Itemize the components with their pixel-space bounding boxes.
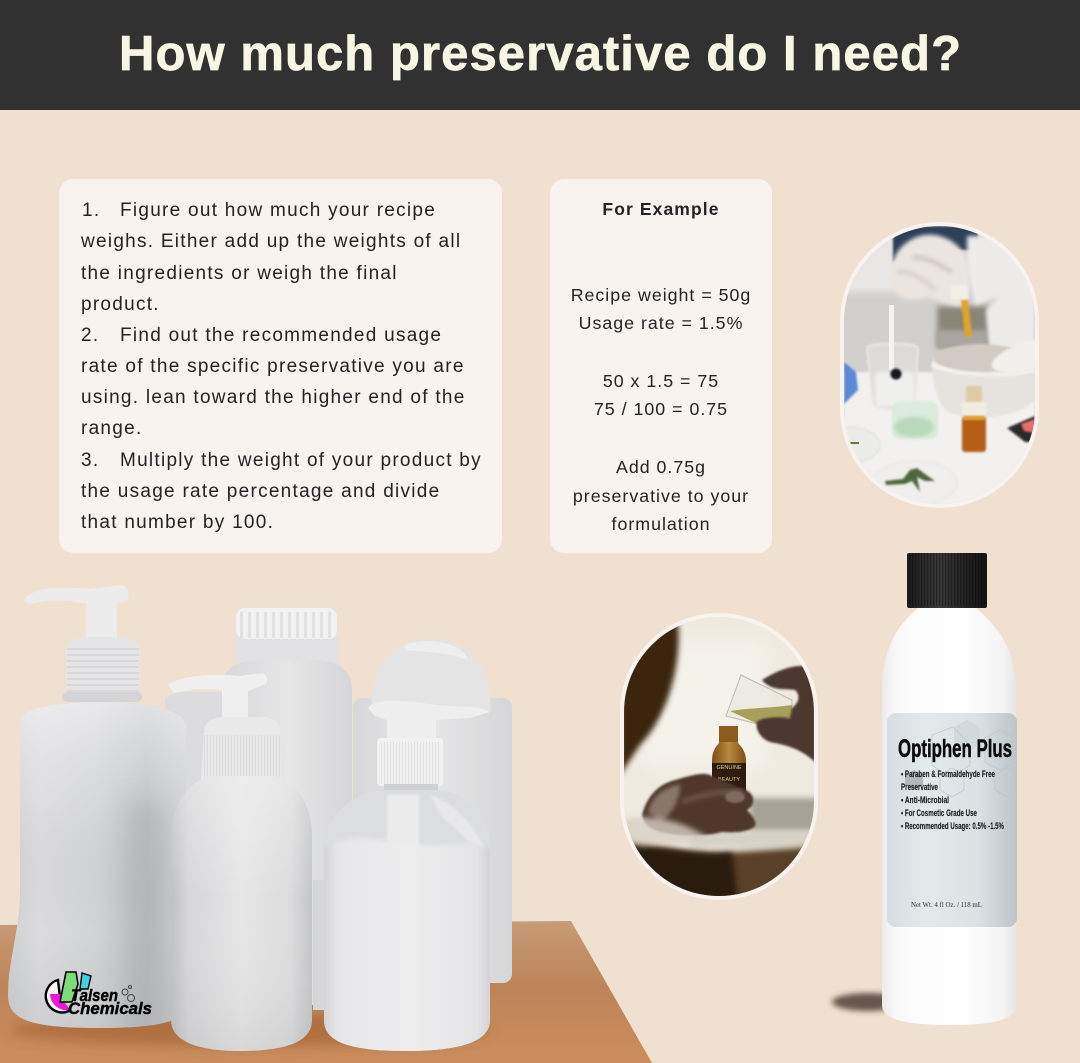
product bottle: Optiphen Plus [882,553,1019,1025]
panel: instructions: using. lean toward the higher end of the [81,387,466,408]
logo: Talsen Chemicals: Talsen [71,987,118,1005]
title banner [0,0,1080,110]
panel: worked example: 50 x 1.5 = 75 [603,371,719,391]
panel: instructions: range. [81,418,142,439]
panel: instructions: the ingredients or weigh the final [81,263,398,284]
panel: worked example [550,179,772,553]
panel: worked example: Recipe weight = 50g [571,285,751,305]
amber bottle: BEAUTY [718,777,740,783]
panel: worked example: formulation [612,514,710,534]
panel: instructions: weighs. Either add up the weights of all [80,231,461,252]
pouring hand [756,666,815,762]
bottle: far back block [165,692,235,992]
panel: worked example: For Example [602,199,720,219]
product label: • Recommended Usage: 0.5% -1.5% [901,821,1004,832]
product label: • For Cosmetic Grade Use [901,808,977,819]
product label: Optiphen Plus [898,735,1012,763]
photo: pouring oil into amber bottle [620,613,820,900]
panel: instructions: Find out the recommended usage [120,325,442,346]
panel: instructions: Multiply the weight of your product by [120,450,482,471]
bottle: front middle pump [168,673,312,1051]
panel: instructions: product. [81,294,160,315]
product label [887,713,1019,927]
bottle shadow [832,993,904,1011]
panel: instructions: 3. [81,450,99,471]
title banner: How much preservative do I need? [119,27,961,81]
amber bottle [712,726,746,792]
photo: lab dropper and mortar [820,222,1039,508]
product label: Preservative [901,782,938,793]
panel: worked example: preservative to your [573,486,749,506]
bottle: powder shaker [223,608,353,1010]
panel: worked example: Usage rate = 1.5% [579,313,743,333]
product label: Net Wt. 4 fl Oz. / 118 mL [911,901,982,909]
panel: instructions [59,179,502,553]
glass beaker [726,675,792,724]
logo: Talsen Chemicals [46,972,152,1018]
holding hand [642,774,755,835]
bottle: front right pump with clear shoulder [320,701,495,1055]
table top [0,921,652,1063]
bottle: back right with dome cap [353,639,512,983]
panel: instructions: 1. [82,200,100,221]
product group: white bottles [8,585,512,1055]
panel: instructions: the usage rate percentage and divide [81,481,440,502]
amber bottle: GENUINE [716,765,742,771]
black cap [907,553,987,608]
shadow under bottles [10,1014,490,1046]
panel: worked example: 75 / 100 = 0.75 [594,399,728,419]
panel: worked example: Add 0.75g [616,457,706,477]
logo: Talsen Chemicals: Chemicals [68,1000,152,1018]
panel: instructions: 2. [81,325,99,346]
bottle body [882,608,1016,1025]
panel: instructions: that number by 100. [81,512,274,533]
bottle: large pump left [8,585,186,1030]
product label: • Paraben & Formaldehyde Free [901,769,995,780]
panel: instructions: Figure out how much your recipe [120,200,436,221]
panel: instructions: rate of the specific preservative you are [81,356,465,377]
product label: • Anti-Microbial [901,795,949,806]
